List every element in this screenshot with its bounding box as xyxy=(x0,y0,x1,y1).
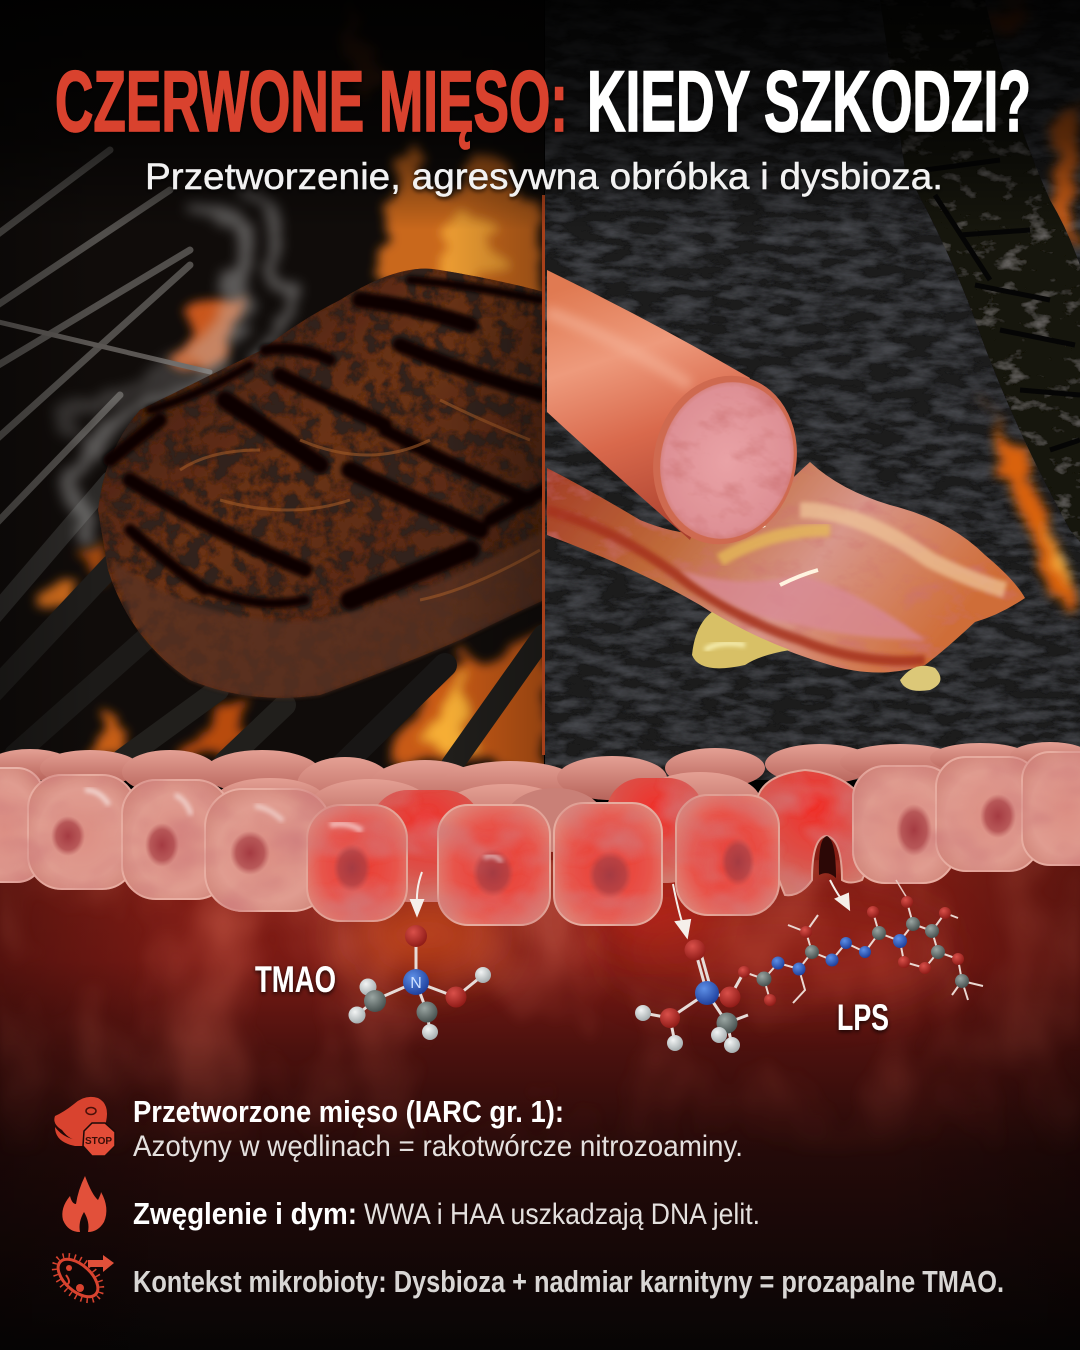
cell 4 xyxy=(205,789,331,911)
cell 7 xyxy=(554,803,662,925)
fire behind the grill xyxy=(38,0,544,770)
cell 8 xyxy=(676,795,779,915)
bacon strip xyxy=(547,462,1025,672)
molecule: LPS chain xyxy=(738,896,983,1006)
text block: processed meat: Przetworzone mięso (IARC gr. 1): xyxy=(133,1094,564,1129)
arrow to right LPS chain xyxy=(830,880,849,909)
cell 11 xyxy=(936,757,1039,871)
back row of cells xyxy=(0,742,1080,852)
smoke xyxy=(70,190,290,530)
cell 9: damaged cell with gap xyxy=(757,770,872,895)
icon: flame xyxy=(62,1176,106,1232)
steak xyxy=(98,269,544,698)
steak side crust xyxy=(112,530,544,698)
cell 6 xyxy=(438,805,550,925)
cell 12 xyxy=(1022,752,1080,865)
grill bars xyxy=(0,150,544,768)
label: TMAO: TMAO xyxy=(255,959,336,1000)
cell 2 xyxy=(28,775,136,889)
molecule: TMAO xyxy=(348,925,491,1040)
charred log xyxy=(880,0,1080,560)
icon: bacterium with arrow xyxy=(46,1247,114,1309)
molecule: LPS head group xyxy=(635,940,748,1053)
arrow to TMAO xyxy=(411,872,423,915)
arrow to left LPS molecule xyxy=(673,884,690,937)
cell 10 xyxy=(853,766,955,883)
cell 3 xyxy=(122,780,230,899)
vertical divider xyxy=(542,195,545,755)
top title shade xyxy=(0,0,1080,230)
icon: steak with stop sign xyxy=(54,1097,115,1156)
text block: charring and smoke: WWA i HAA uszkadzają DNA jelit. xyxy=(364,1198,760,1231)
title: CZERWONE MIĘSO: xyxy=(55,54,568,150)
subtitle: Przetworzenie, agresywna obróbka i dysbioza. xyxy=(145,156,943,197)
text block: processed meat: Azotyny w wędlinach = rakotwórcze nitrozoaminy. xyxy=(133,1130,743,1163)
text block: charring and smoke xyxy=(133,1196,760,1231)
red cell behind, between cells 7 and 8 xyxy=(606,778,704,883)
panel: processed meat on slate xyxy=(545,0,1080,780)
text block: charring and smoke: Zwęglenie i dym: xyxy=(133,1196,357,1231)
red cell behind, between cells 5 and 6 xyxy=(370,790,482,902)
panel: lower blood-red background xyxy=(0,830,1080,1350)
cell 1 xyxy=(0,768,43,882)
melted fat drops xyxy=(692,612,940,691)
sausage xyxy=(545,270,797,544)
link to chain xyxy=(896,880,907,898)
text block: processed meat xyxy=(133,1094,743,1163)
icon: steak with stop sign: STOP xyxy=(85,1136,112,1147)
cell 5 xyxy=(307,805,407,921)
label: LPS: LPS xyxy=(837,997,889,1038)
panel: grilled steak over fire xyxy=(0,0,544,780)
molecule: TMAO: N xyxy=(410,975,422,992)
arrows out of the gut barrier xyxy=(411,872,907,937)
intestinal wall: epithelial cells xyxy=(0,742,1080,925)
embers on the right xyxy=(975,2,1080,620)
